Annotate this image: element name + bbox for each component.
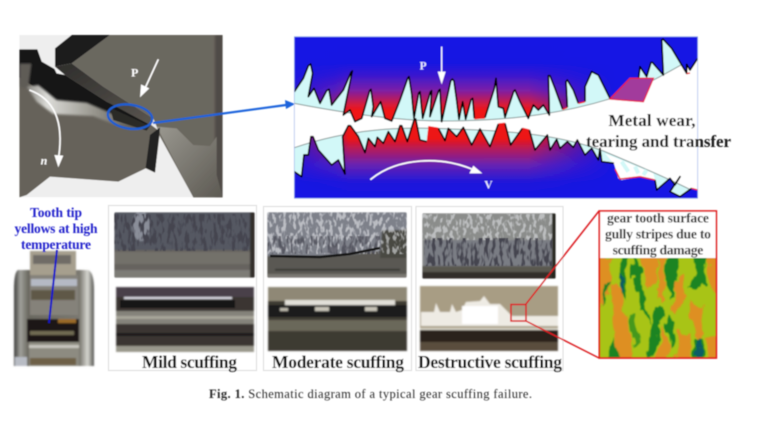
panel: moderate scuffing <box>264 206 412 372</box>
inset caption: gully stripes due to <box>605 226 711 241</box>
contact gap <box>294 56 698 193</box>
surface reference curves <box>294 56 698 193</box>
annotation: tearing and transfer: tearing and transfer <box>586 132 731 151</box>
label: tooth tip: Tooth tip <box>30 205 82 220</box>
worn patch transfer <box>610 78 653 102</box>
inset caption: scuffing damage <box>613 242 703 257</box>
label: tooth tip <box>14 205 98 252</box>
driving gear tooth, lower left <box>18 77 160 198</box>
label: moderate scuffing: Moderate scuffing <box>272 352 404 372</box>
panel: destructive scuffing <box>416 206 563 372</box>
photo: destructive bottom <box>420 286 558 351</box>
inset caption <box>605 211 711 257</box>
photo: moderate bottom <box>268 287 407 351</box>
cyan asperity band <box>294 37 698 198</box>
arrow: zoom to contact detail <box>153 100 295 123</box>
panel: gear photo <box>14 251 94 366</box>
annotation: metal wear: Metal wear, <box>608 111 696 130</box>
pointer line <box>49 250 57 323</box>
contact zone ellipse <box>106 102 154 132</box>
panel: gully stripes inset <box>597 211 720 363</box>
arrow: load P <box>131 59 158 97</box>
label: tooth tip: temperature <box>21 237 91 252</box>
panel: 3D gear mesh view <box>19 35 223 197</box>
photo: mild top <box>114 211 255 278</box>
arrow: load P detail: P <box>420 61 427 73</box>
arrow: velocity V: V <box>484 179 493 191</box>
upper heated body <box>294 37 698 122</box>
heat map of tooth surface <box>599 257 716 358</box>
arrow: load P detail <box>420 47 446 84</box>
panel: mild scuffing <box>108 206 256 372</box>
figure caption: Fig. 1. Schematic diagram of a typical gear scuffing failure. <box>209 387 532 401</box>
photo: moderate top <box>267 212 407 278</box>
label: tooth tip: yellows at high <box>14 221 98 236</box>
arrow: rotation n: n <box>41 154 48 168</box>
driven gear tooth, upper right <box>72 35 223 197</box>
photo: mild bottom <box>116 287 254 352</box>
white worn cavity <box>605 153 655 179</box>
arrow: rotation n <box>29 90 63 168</box>
label: mild scuffing: Mild scuffing <box>142 352 237 372</box>
callout lines and selection box <box>511 211 599 358</box>
lower heated body <box>294 119 698 198</box>
arrow: velocity V <box>370 161 493 191</box>
asperity outlines <box>294 39 698 122</box>
panel: asperity contact diagram <box>294 37 698 198</box>
arrow: load P: P <box>131 66 138 80</box>
inset caption: gear tooth surface <box>607 211 709 226</box>
photo: destructive top <box>422 213 556 279</box>
label: destructive scuffing: Destructive scuffing <box>418 352 562 372</box>
